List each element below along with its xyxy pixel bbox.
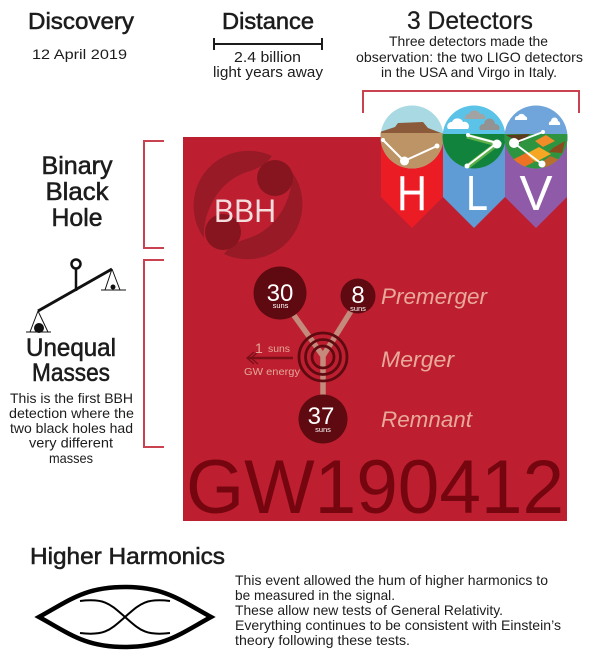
heading block: 3 detectors [356,7,583,80]
heading block: 3 detectors: 3 Detectors [407,7,533,35]
circle: 37 suns [298,394,348,444]
icon: detector L [442,106,506,228]
arrow: GW energy: suns [268,344,290,355]
icon: detector L: L [466,167,488,221]
text: higher harmonics description: theory following these tests. [235,632,410,648]
text: unequal masses description [9,390,134,466]
icon: detector V: V [520,167,553,221]
text: higher harmonics description: be measured in the signal. [235,587,395,603]
labels: stages [381,284,489,432]
icon: detector H [380,106,444,228]
heading: higher harmonics: Higher Harmonics [30,543,225,569]
labels: stages: Premerger [381,284,489,309]
heading: unequal masses [26,334,116,387]
heading block: 3 detectors: Three detectors made the [389,33,548,49]
icon: detector H: H [397,167,427,221]
circle: 37 suns: 37 [308,403,334,430]
heading block: discovery: 12 April 2019 [32,46,127,62]
text: higher harmonics description [235,572,561,648]
circle: 8 suns: 8 [351,282,365,309]
heading block: distance [213,8,324,81]
heading: binary black hole: Hole [52,204,102,232]
heading block: distance: light years away [213,65,324,81]
circle: 37 suns: suns [315,425,331,434]
icon: BBH logo: BBH [214,193,276,229]
heading: unequal masses: Masses [32,359,110,387]
text: unequal masses description: masses [49,450,93,466]
heading block: distance: 2.4 billion [234,50,301,66]
circle: 8 suns [340,278,376,314]
labels: stages: Merger [381,347,456,372]
panel: red background [183,137,567,521]
bracket: detectors [363,91,579,113]
heading block: distance: Distance [222,8,314,34]
text: unequal masses description: detection where the [9,405,134,421]
title: GW190412: GW190412 [186,445,564,530]
circle: 30 suns [254,266,306,320]
icon: balance scale [26,260,126,333]
heading block: discovery: Discovery [28,8,135,34]
icon: BBH logo [194,151,302,259]
labels: stages: Remnant [381,407,473,432]
bracket: unequal masses [144,260,164,447]
text: higher harmonics description: Everything continues to be consistent with Einstein’s [235,617,561,633]
heading: binary black hole: Black [46,178,109,206]
text: unequal masses description: This is the first BBH [10,390,133,406]
circle: 30 suns: 30 [267,280,293,307]
text: unequal masses description: two black holes had [10,420,133,436]
circle: 8 suns: suns [350,304,366,313]
heading block: 3 detectors: in the USA and Virgo in Italy. [381,64,557,80]
diagram: merger [244,266,376,444]
heading: unequal masses: Unequal [26,334,116,362]
icon: detector V [504,106,568,228]
bracket: binary black hole [144,141,164,248]
arrow: GW energy [244,340,301,378]
heading: binary black hole [42,152,113,232]
text: higher harmonics description: This event allowed the hum of higher harmonics to [235,572,548,588]
arrow: GW energy: GW energy [244,366,301,378]
heading block: 3 detectors: observation: the two LIGO detectors [356,49,583,65]
text: unequal masses description: very different [29,434,113,450]
heading block: discovery [28,8,135,62]
heading: binary black hole: Binary [42,152,113,180]
icon: harmonics waveform [39,587,211,647]
circle: 30 suns: suns [273,301,289,310]
text: higher harmonics description: These allow new tests of General Relativity. [235,602,503,618]
arrow: GW energy: 1 [255,340,263,356]
